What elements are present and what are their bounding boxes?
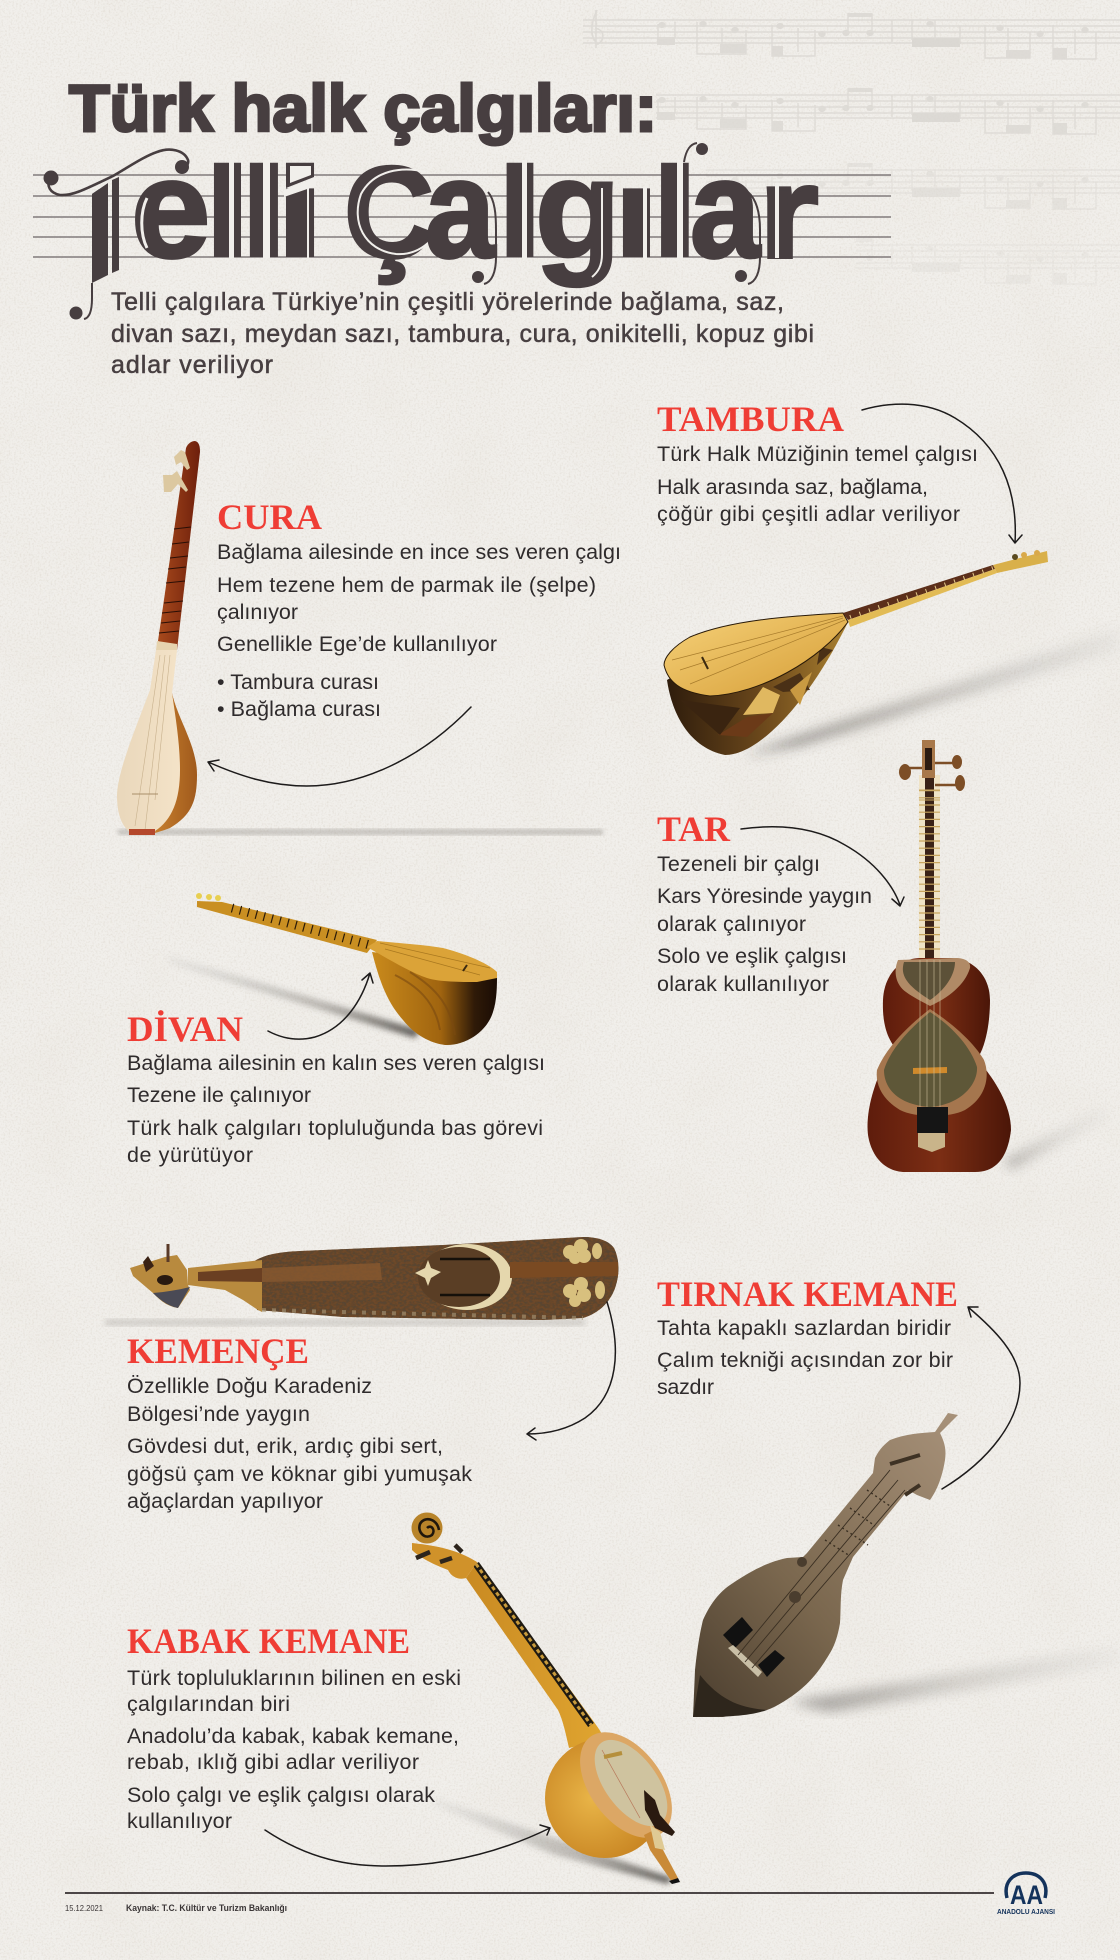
divan description: de yürütüyor	[127, 1143, 253, 1167]
panel: cura	[117, 441, 621, 835]
cura description: Genellikle Ege’de kullanılıyor	[217, 632, 497, 656]
kemençe heading: KEMENÇE	[127, 1331, 309, 1371]
kemençe description: göğsü çam ve köknar gibi yumuşak	[127, 1462, 472, 1486]
logo: Anadolu Ajansı: AA	[1010, 1880, 1043, 1910]
divan shadow	[167, 955, 420, 1038]
tar description: olarak çalınıyor	[657, 912, 806, 936]
tambura shadow	[745, 628, 1120, 755]
title: Telli Çalgılar decorative lettering: r	[759, 139, 818, 285]
title: Telli Çalgılar decorative lettering	[44, 130, 818, 320]
kemençe description	[127, 1374, 472, 1513]
footer	[65, 1873, 1055, 1916]
tambura description: Türk Halk Müziğinin temel çalgısı	[657, 442, 978, 466]
panel: kemençe	[105, 1237, 618, 1513]
title: Telli Çalgılar decorative lettering: ı	[609, 140, 664, 285]
title: Telli Çalgılar decorative lettering: i	[272, 140, 329, 285]
tırnak kemane shadow	[790, 1645, 1120, 1712]
logo: Anadolu Ajansı: ANADOLU AJANSI	[997, 1907, 1055, 1916]
kabak kemane description: Solo çalgı ve eşlik çalgısı olarak	[127, 1783, 435, 1807]
instrument: kemençe	[130, 1237, 618, 1320]
kabak kemane description: rebab, ıklığ gibi adlar veriliyor	[127, 1750, 419, 1774]
intro paragraph: divan sazı, meydan sazı, tambura, cura, onikitelli, kopuz gibi	[111, 320, 814, 348]
kemençe description: ağaçlardan yapılıyor	[127, 1489, 323, 1513]
title staff lines	[33, 175, 891, 257]
kabak kemane shadow	[435, 1798, 672, 1884]
intro paragraph: Telli çalgılara Türkiye’nin çeşitli yörelerinde bağlama, saz,	[111, 288, 784, 316]
tar arrow	[741, 827, 904, 906]
panel: tırnak kemane	[657, 1274, 1120, 1717]
divan description: Bağlama ailesinin en kalın ses veren çalgısı	[127, 1051, 545, 1075]
cura description: Hem tezene hem de parmak ile (şelpe)	[217, 573, 596, 597]
panel: tar	[657, 740, 1110, 1172]
title: Telli Çalgılar decorative lettering: l	[200, 140, 255, 285]
instrument: cura	[117, 441, 200, 835]
kemençe description: Özellikle Doğu Karadeniz	[127, 1374, 372, 1398]
tırnak kemane description: Çalım tekniği açısından zor bir	[657, 1348, 953, 1372]
title: Telli Çalgılar decorative lettering: Ç	[344, 141, 434, 286]
tırnak kemane description	[657, 1316, 953, 1399]
cura description: çalınıyor	[217, 600, 298, 624]
kabak kemane heading: KABAK KEMANE	[127, 1621, 410, 1661]
footer date: 15.12.2021	[65, 1903, 103, 1913]
tırnak kemane description: sazdır	[657, 1375, 714, 1399]
title: Telli Çalgılar decorative lettering: l	[647, 140, 703, 285]
title: Telli Çalgılar decorative lettering: T	[48, 135, 130, 286]
title: Telli Çalgılar decorative lettering: e	[131, 130, 210, 287]
cura description: Bağlama ailesinde en ince ses veren çalgı	[217, 540, 621, 564]
kabak kemane description: Türk topluluklarının bilinen en eski	[127, 1666, 461, 1690]
cura description: • Tambura curası	[217, 670, 379, 694]
kabak kemane arrow	[265, 1825, 550, 1866]
tambura heading: TAMBURA	[657, 399, 844, 439]
intro paragraph: adlar veriliyor	[111, 351, 273, 379]
tar description	[657, 852, 872, 996]
tambura description: çöğür gibi çeşitli adlar veriliyor	[657, 502, 960, 526]
divan heading: DİVAN	[127, 1009, 243, 1049]
kemençe shadow	[105, 1319, 585, 1326]
tırnak kemane description: Tahta kapaklı sazlardan biridir	[657, 1316, 951, 1340]
tar description: olarak kullanılıyor	[657, 972, 829, 996]
kabak kemane description: kullanılıyor	[127, 1809, 232, 1833]
tırnak kemane heading: TIRNAK KEMANE	[657, 1274, 958, 1314]
cura heading: CURA	[217, 497, 322, 537]
title: Telli Çalgılar decorative lettering: l	[493, 140, 547, 285]
intro paragraph	[111, 288, 814, 379]
instrument: tambura	[664, 550, 1048, 755]
background sheet music	[583, 10, 1120, 284]
tar description: Solo ve eşlik çalgısı	[657, 944, 847, 968]
title: Telli Çalgılar decorative lettering: a	[690, 131, 761, 287]
title: Telli Çalgılar decorative lettering: a	[425, 131, 496, 287]
kabak kemane description	[127, 1666, 461, 1833]
tambura description: Halk arasında saz, bağlama,	[657, 475, 928, 499]
tar description: Kars Yöresinde yaygın	[657, 884, 872, 908]
tambura description	[657, 442, 978, 526]
divan description: Türk halk çalgıları topluluğunda bas görevi	[127, 1116, 543, 1140]
cura shadow	[118, 829, 603, 835]
instrument: kabak kemane	[412, 1512, 691, 1884]
panel: tambura	[657, 399, 1120, 755]
divan description	[127, 1051, 545, 1167]
logo: Anadolu Ajansı	[997, 1873, 1055, 1916]
kabak kemane description: çalgılarından biri	[127, 1692, 290, 1716]
title: Telli Çalgılar decorative lettering: g	[535, 130, 621, 287]
cura description: • Bağlama curası	[217, 697, 381, 721]
tar shadow	[1005, 1108, 1110, 1170]
instrument: tar	[868, 740, 1011, 1172]
title: Türk halk çalgıları: Türk halk çalgıları:	[69, 71, 657, 145]
kemençe description: Bölgesi’nde yaygın	[127, 1402, 310, 1426]
cura description	[217, 540, 621, 721]
kemençe description: Gövdesi dut, erik, ardıç gibi sert,	[127, 1434, 443, 1458]
kabak kemane description: Anadolu’da kabak, kabak kemane,	[127, 1724, 459, 1748]
title: Telli Çalgılar decorative lettering: l	[236, 140, 292, 285]
instrument: divan	[196, 893, 497, 1045]
divan arrow	[268, 973, 373, 1039]
tırnak kemane arrow	[942, 1307, 1020, 1489]
tar description: Tezeneli bir çalgı	[657, 852, 820, 876]
kemençe arrow	[527, 1302, 615, 1440]
footer source: Kaynak: T.C. Kültür ve Turizm Bakanlığı	[126, 1903, 287, 1913]
instrument: tırnak kemane	[693, 1413, 958, 1717]
cura arrow	[208, 707, 471, 786]
divan description: Tezene ile çalınıyor	[127, 1083, 311, 1107]
panel: divan	[127, 893, 545, 1167]
tambura arrow	[862, 404, 1022, 543]
tar heading: TAR	[657, 809, 731, 849]
panel: kabak kemane	[127, 1512, 691, 1884]
